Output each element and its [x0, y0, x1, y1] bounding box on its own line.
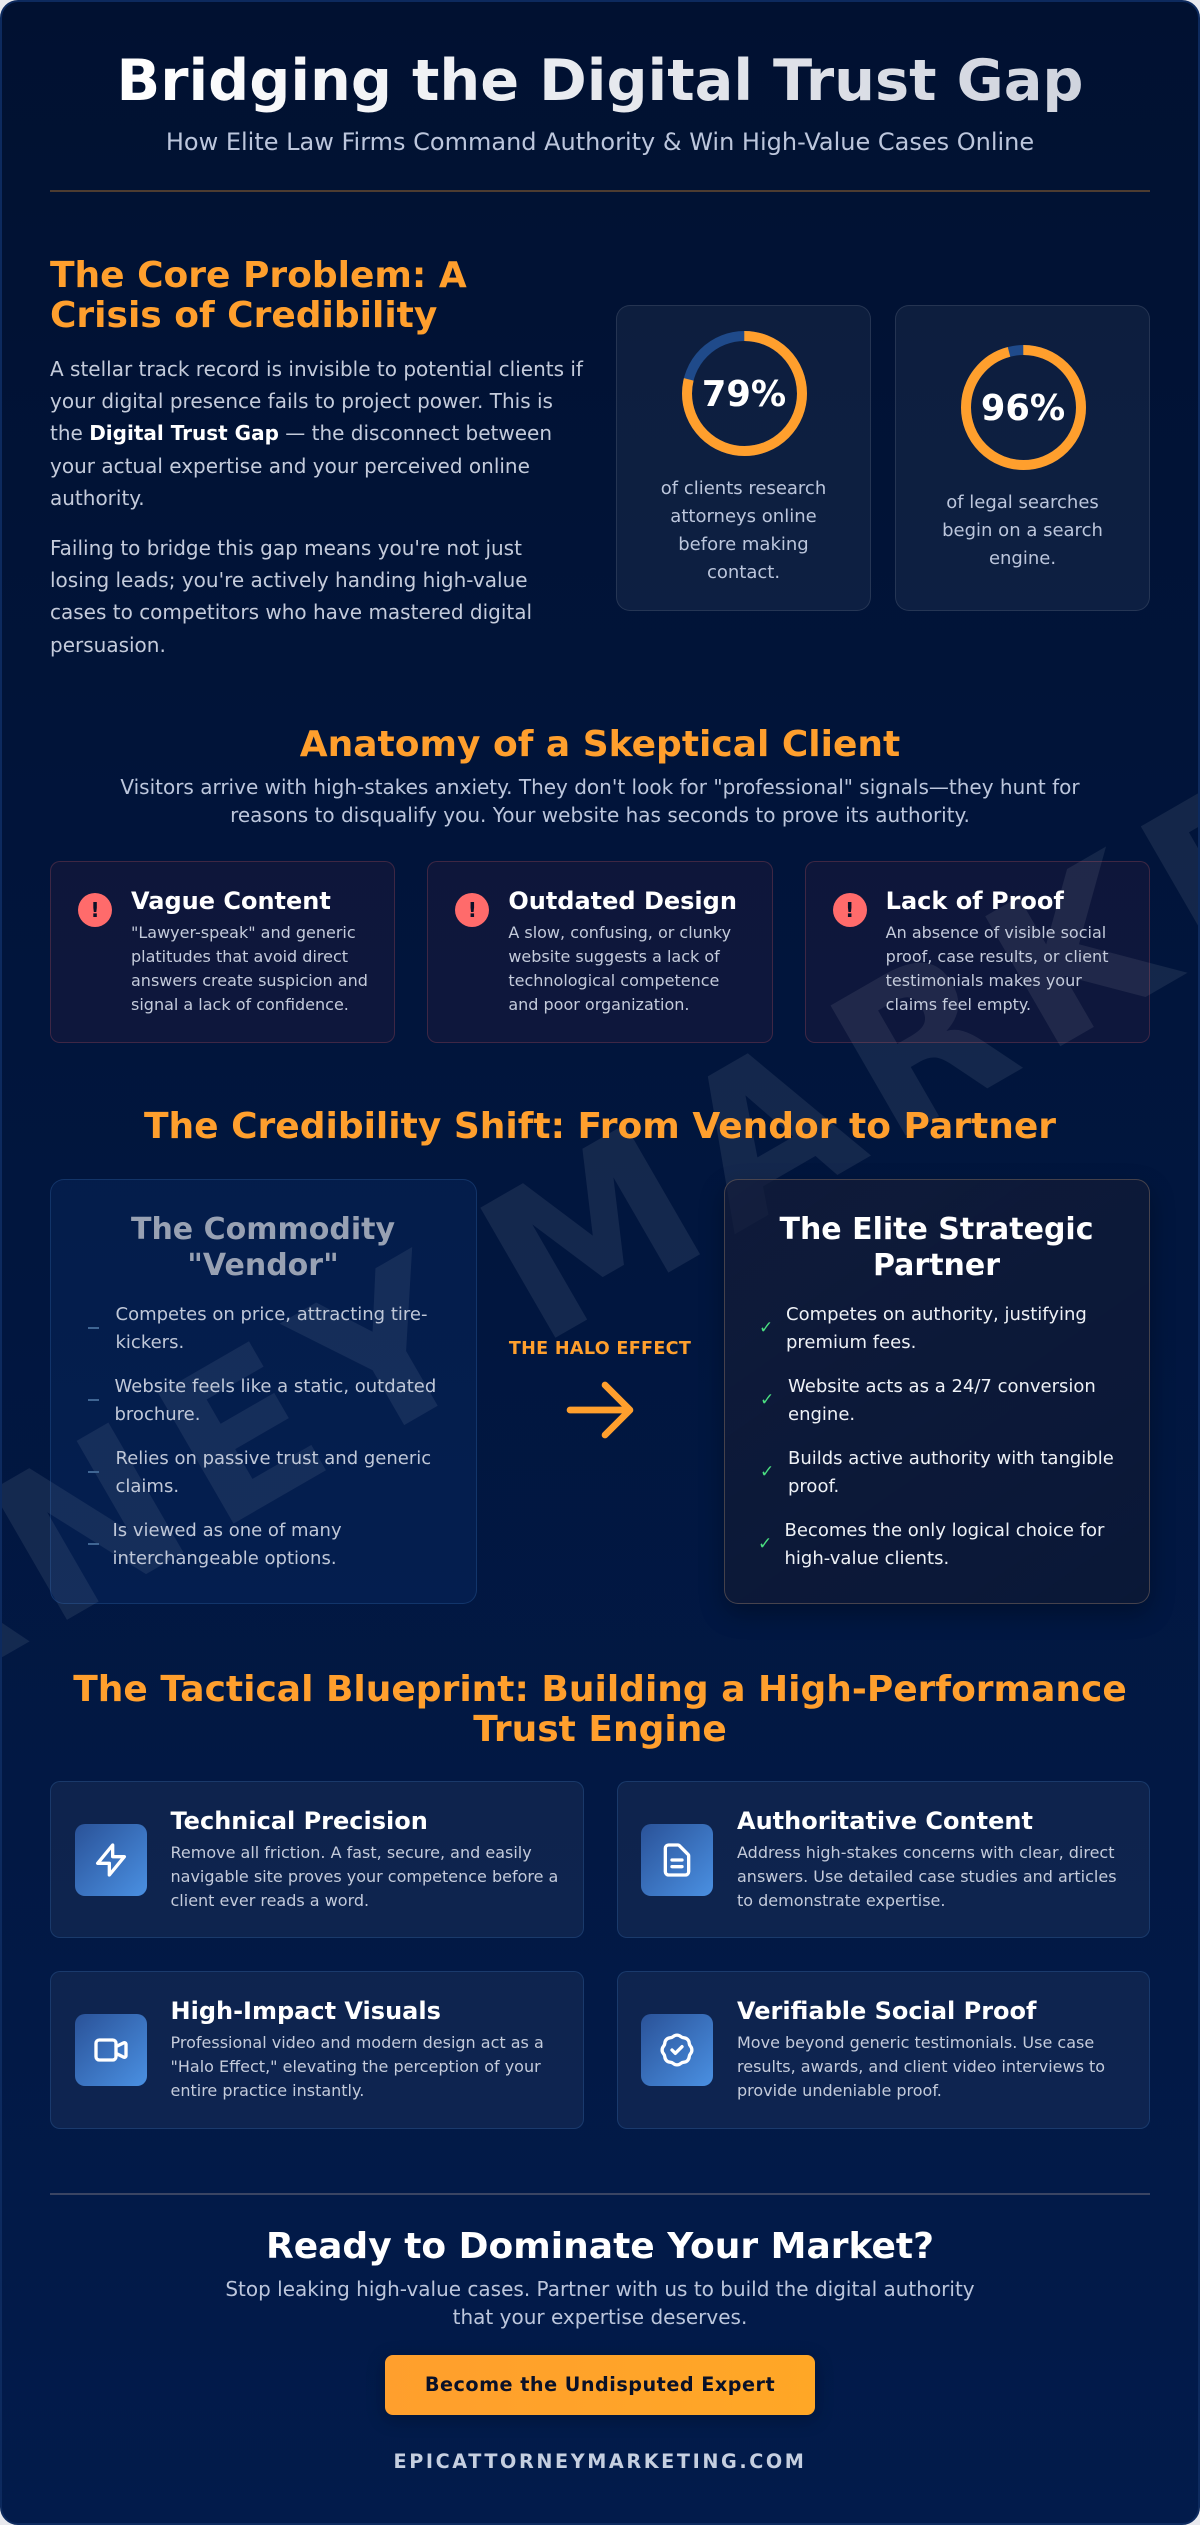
- heading: tactical blueprint: The Tactical Blueprint: Building a High-Performance: [73, 1668, 1127, 1710]
- stat label: of legal searches: [946, 492, 1099, 513]
- heading: tactical blueprint: Trust Engine: [473, 1708, 727, 1750]
- panel: outdated design: [427, 861, 773, 1043]
- column title: "Vendor": [187, 1248, 339, 1283]
- footer url: EPICATTORNEYMARKETING.COM: [393, 2450, 807, 2473]
- column title: [779, 1212, 1094, 1283]
- heading: core problem: The Core Problem: A: [50, 255, 467, 296]
- text block: call to action: that your expertise deserves.: [453, 2305, 747, 2329]
- card text: provide undeniable proof.: [737, 2081, 942, 2100]
- card text: answers. Use detailed case studies and articles: [737, 1867, 1117, 1886]
- list item: [116, 1304, 427, 1352]
- subtitle: How Elite Law Firms Command Authority & Win High-Value Cases Online: [166, 128, 1034, 156]
- list item: [788, 1448, 1114, 1496]
- icon: bolt: [75, 1824, 147, 1896]
- heading: tactical blueprint: [73, 1668, 1127, 1750]
- list item: [116, 1448, 431, 1496]
- list item: [788, 1376, 1096, 1424]
- icon: alert: [78, 893, 112, 927]
- panel: commodity vendor: [50, 1179, 476, 1604]
- label: the halo effect: THE HALO EFFECT: [509, 1339, 691, 1359]
- list item: [784, 1520, 1104, 1568]
- panel: stat 79%: [616, 305, 871, 611]
- column title: [131, 1212, 395, 1283]
- text block: anatomy intro: [120, 775, 1080, 827]
- card text: website suggests a lack of: [508, 947, 720, 966]
- card text: technological competence: [508, 971, 719, 990]
- card text: to demonstrate expertise.: [737, 1891, 945, 1910]
- text block: core problem paragraph one: your actual expertise and your perceived online: [50, 454, 530, 478]
- check mark: ✓: [760, 1390, 774, 1410]
- card text: signal a lack of confidence.: [131, 995, 349, 1014]
- dash marker: [88, 1471, 99, 1473]
- card text: Move beyond generic testimonials. Use case: [737, 2033, 1094, 2052]
- card title: Technical Precision: [170, 1807, 428, 1835]
- text block: core problem paragraph one: authority.: [50, 486, 145, 510]
- card text: [508, 923, 731, 1014]
- card text: proof, case results, or client: [886, 947, 1108, 966]
- column title: Partner: [873, 1248, 1000, 1283]
- stat label: engine.: [989, 548, 1056, 569]
- card text: [737, 1843, 1117, 1910]
- card title: Lack of Proof: [886, 887, 1064, 915]
- heading: credibility shift: The Credibility Shift: From Vendor to Partner: [144, 1106, 1056, 1147]
- card title: Vague Content: [131, 887, 331, 915]
- list item: engine.: [788, 1404, 855, 1424]
- arrow: [566, 1382, 634, 1438]
- button: Become the Undisputed Expert: [425, 2373, 775, 2396]
- card text: An absence of visible social: [886, 923, 1106, 942]
- chart: 96% donut: [961, 345, 1086, 470]
- list item: high-value clients.: [784, 1548, 949, 1568]
- panel: vague content: [50, 861, 395, 1043]
- heading: core problem: [50, 255, 467, 336]
- list item: [114, 1376, 436, 1424]
- card text: testimonials makes your: [886, 971, 1082, 990]
- check mark: ✓: [759, 1318, 773, 1338]
- card title: High-Impact Visuals: [170, 1997, 441, 2025]
- heading: anatomy: Anatomy of a Skeptical Client: [300, 724, 900, 765]
- column title: The Elite Strategic: [779, 1212, 1094, 1247]
- icon: alert: !: [468, 898, 477, 922]
- card text: [170, 2033, 544, 2100]
- card text: claims feel empty.: [886, 995, 1031, 1014]
- icon: alert: [833, 893, 867, 927]
- card text: [886, 923, 1108, 1014]
- text block: anatomy intro: reasons to disqualify you. Your website has seconds to prove its authority.: [230, 803, 970, 827]
- panel: stat 96%: [895, 305, 1150, 611]
- card text: entire practice instantly.: [170, 2081, 364, 2100]
- card text: "Halo Effect," elevating the perception of your: [170, 2057, 541, 2076]
- card text: answers create suspicion and: [131, 971, 368, 990]
- card text: A slow, confusing, or clunky: [508, 923, 731, 942]
- icon: alert: !: [845, 898, 854, 922]
- text block: core problem paragraph one: the Digital Trust Gap — the disconnect between: [50, 421, 552, 445]
- icon: alert: [455, 893, 489, 927]
- list item: premium fees.: [786, 1332, 916, 1352]
- list item: Website feels like a static, outdated: [114, 1376, 436, 1396]
- card text: [131, 923, 368, 1014]
- card text: platitudes that avoid direct: [131, 947, 348, 966]
- chart: 79% donut: 79%: [701, 374, 786, 415]
- list item: kickers.: [116, 1332, 184, 1352]
- column title: The Commodity: [131, 1212, 395, 1247]
- panel: authoritative content: [616, 1781, 1150, 1938]
- card text: navigable site proves your competence before a: [170, 1867, 558, 1886]
- panel: lack of proof: [805, 861, 1150, 1043]
- list item: brochure.: [114, 1404, 200, 1424]
- list item: Relies on passive trust and generic: [116, 1448, 431, 1468]
- list item: interchangeable options.: [112, 1548, 337, 1568]
- card text: Professional video and modern design act as a: [170, 2033, 544, 2052]
- list item: Website acts as a 24/7 conversion: [788, 1376, 1096, 1396]
- list item: claims.: [116, 1476, 179, 1496]
- card title: Authoritative Content: [737, 1807, 1033, 1835]
- stat label: [661, 478, 826, 583]
- chart: 96% donut: 96%: [980, 388, 1065, 429]
- card text: client ever reads a word.: [170, 1891, 369, 1910]
- text block: core problem paragraph one: A stellar track record is invisible to potential clients if: [50, 356, 583, 380]
- text block: core problem paragraph two: Failing to bridge this gap means you're not just: [50, 536, 522, 560]
- list item: [112, 1520, 342, 1568]
- title: Bridging the Digital Trust Gap: [116, 47, 1084, 114]
- panel: high-impact visuals: [50, 1971, 584, 2129]
- text block: core problem paragraph one: [50, 356, 584, 510]
- list item: proof.: [788, 1476, 839, 1496]
- text block: call to action: Stop leaking high-value cases. Partner with us to build the digital authority: [225, 2277, 975, 2301]
- card text: results, awards, and client video interviews to: [737, 2057, 1105, 2076]
- text block: core problem paragraph two: persuasion.: [50, 633, 166, 657]
- card text: Remove all friction. A fast, secure, and easily: [170, 1843, 532, 1862]
- list item: Is viewed as one of many: [112, 1520, 342, 1540]
- card text: Address high-stakes concerns with clear, direct: [737, 1843, 1114, 1862]
- text block: call to action: [225, 2277, 975, 2329]
- card text: and poor organization.: [508, 995, 689, 1014]
- stat label: of clients research: [661, 478, 826, 499]
- icon: alert: !: [90, 898, 100, 922]
- list item: Competes on price, attracting tire-: [116, 1304, 427, 1324]
- dash marker: [88, 1543, 99, 1545]
- text block: core problem paragraph one: your digital presence fails to project power. This is: [50, 389, 553, 413]
- list item: Builds active authority with tangible: [788, 1448, 1114, 1468]
- icon: document: [641, 1824, 713, 1896]
- text block: core problem paragraph two: cases to competitors who have mastered digital: [50, 600, 532, 624]
- dash marker: [88, 1399, 99, 1401]
- list item: Becomes the only logical choice for: [784, 1520, 1104, 1540]
- card title: Verifiable Social Proof: [737, 1997, 1036, 2025]
- heading: core problem: Crisis of Credibility: [50, 295, 437, 336]
- card text: [170, 1843, 558, 1910]
- card text: "Lawyer-speak" and generic: [131, 923, 356, 942]
- check mark: ✓: [758, 1534, 772, 1554]
- panel: verifiable social proof: [616, 1971, 1150, 2129]
- icon: badge check: [641, 2014, 713, 2086]
- panel: technical precision: [50, 1781, 584, 1938]
- stat label: contact.: [707, 562, 780, 583]
- text block: anatomy intro: Visitors arrive with high-stakes anxiety. They don't look for "professional" signals—they hunt for: [120, 775, 1080, 799]
- card title: Outdated Design: [508, 887, 737, 915]
- list item: Competes on authority, justifying: [786, 1304, 1087, 1324]
- text block: core problem paragraph two: losing leads; you're actively handing high-value: [50, 568, 528, 592]
- stat label: [942, 492, 1103, 569]
- stat label: begin on a search: [942, 520, 1103, 541]
- icon: video camera: [75, 2014, 147, 2086]
- stat label: attorneys online: [670, 506, 817, 527]
- text block: core problem paragraph two: [50, 536, 532, 657]
- chart: 79% donut: [682, 331, 807, 456]
- check mark: ✓: [760, 1462, 774, 1482]
- list item: [786, 1304, 1087, 1352]
- button: [385, 2355, 815, 2415]
- heading: call to action: Ready to Dominate Your Market?: [266, 2226, 934, 2267]
- card text: [737, 2033, 1105, 2100]
- stat label: before making: [678, 534, 809, 555]
- panel: elite strategic partner: [724, 1179, 1150, 1604]
- dash marker: [88, 1327, 99, 1329]
